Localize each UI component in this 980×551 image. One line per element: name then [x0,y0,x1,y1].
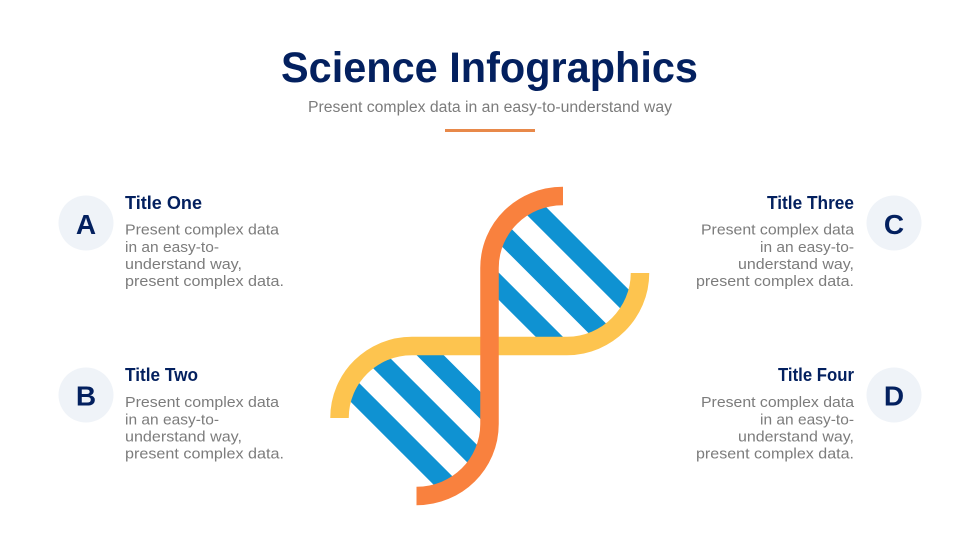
body text C: present complex data. [696,273,854,290]
body text B: understand way, [125,428,242,446]
body text B: Present complex data [125,394,280,411]
title: Science Infographics [281,44,698,92]
item C [696,193,922,290]
item D [696,365,922,462]
body text D: Present complex data [701,394,855,411]
accent rule [445,129,535,132]
body text A: Present complex data [125,222,280,238]
badge A [58,196,114,250]
badge D [866,368,922,422]
letter D: D [884,380,904,412]
body text D: in an easy-to- [760,412,854,428]
body text C: Present complex data [701,222,855,238]
body text A: understand way, [125,256,242,273]
subtitle: Present complex data in an easy-to-understand way [308,99,672,116]
orange strand [416,196,563,496]
heading: Title Two: Title Two [125,365,198,385]
heading: Title One: Title One [125,193,202,213]
letter B: B [76,380,96,412]
body text B [125,394,284,462]
body text C: understand way, [738,256,854,273]
body text A [125,222,284,290]
body text A: in an easy-to- [125,239,219,256]
body text A: present complex data. [125,273,284,290]
body text C: in an easy-to- [760,239,854,256]
body text B: present complex data. [125,446,284,462]
body text D: understand way, [738,428,854,446]
badge C [866,196,922,250]
body text B: in an easy-to- [125,412,219,428]
yellow strand [340,273,640,418]
lower blue rungs [350,355,480,484]
DNA helix illustration [330,186,650,506]
body text D [696,394,855,462]
heading: Title Four: Title Four [778,365,854,385]
body text C [696,222,855,290]
badge B [58,368,114,422]
item A [58,193,284,290]
heading: Title Three: Title Three [767,193,854,213]
item B [58,365,284,462]
body text D: present complex data. [696,446,854,462]
letter C: C [884,209,904,240]
upper blue rungs [498,207,628,337]
letter A: A [76,209,96,240]
